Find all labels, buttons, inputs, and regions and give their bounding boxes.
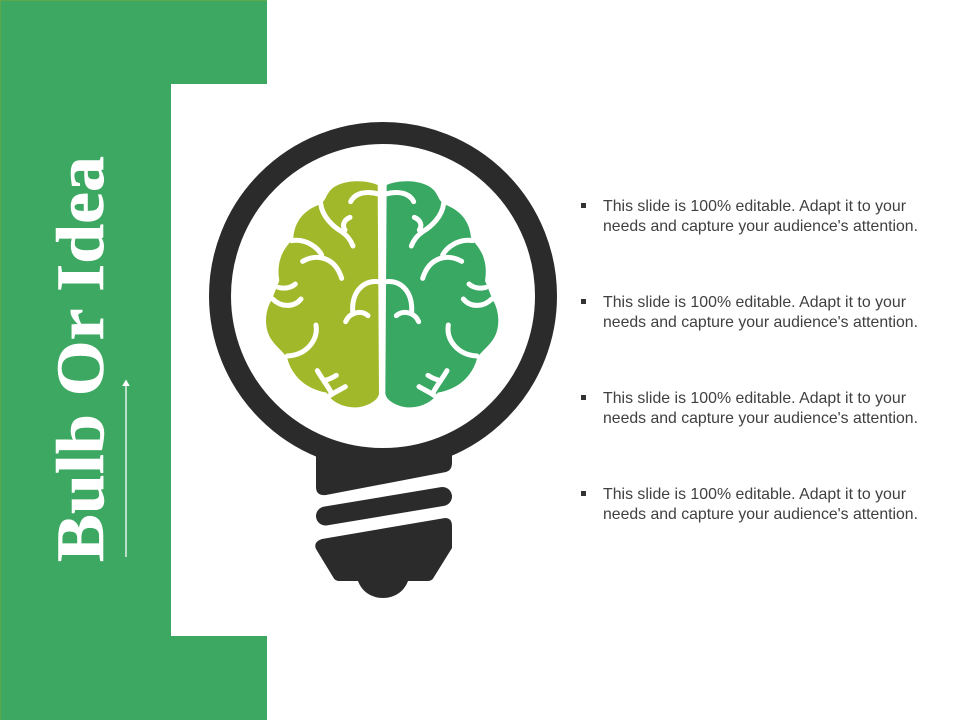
text block: bullet 1: This slide is 100% editable. Adapt it to your	[603, 198, 907, 215]
text block: bullet 4	[581, 486, 918, 523]
bulb thread bar	[326, 496, 442, 516]
bulb glass ring	[220, 133, 546, 459]
bulb neck	[316, 450, 452, 495]
title: Bulb Or Idea	[42, 156, 118, 562]
brain right hemisphere	[385, 181, 498, 407]
text block: bullet 3: This slide is 100% editable. Adapt it to your	[603, 390, 907, 407]
text block: bullet 2: This slide is 100% editable. Adapt it to your	[603, 294, 907, 311]
icon: upward arrow	[122, 380, 130, 557]
text block: bullet 3: needs and capture your audience's attention.	[603, 410, 918, 427]
text block: bullet 3	[581, 390, 918, 427]
icon: brain	[266, 181, 498, 407]
text block: bullet 4: needs and capture your audience's attention.	[603, 506, 918, 523]
brain left hemisphere	[266, 181, 379, 407]
bulb base cap	[315, 518, 452, 598]
text block: bullet 2: needs and capture your audience's attention.	[603, 314, 918, 331]
panel: green sidebar	[0, 0, 267, 720]
icon: light bulb	[220, 133, 546, 598]
text block: bullet 1	[581, 198, 918, 235]
text block: bullet 1: needs and capture your audience's attention.	[603, 218, 918, 235]
text block: bullet 2	[581, 294, 918, 331]
text block: bullet 4: This slide is 100% editable. Adapt it to your	[603, 486, 907, 503]
